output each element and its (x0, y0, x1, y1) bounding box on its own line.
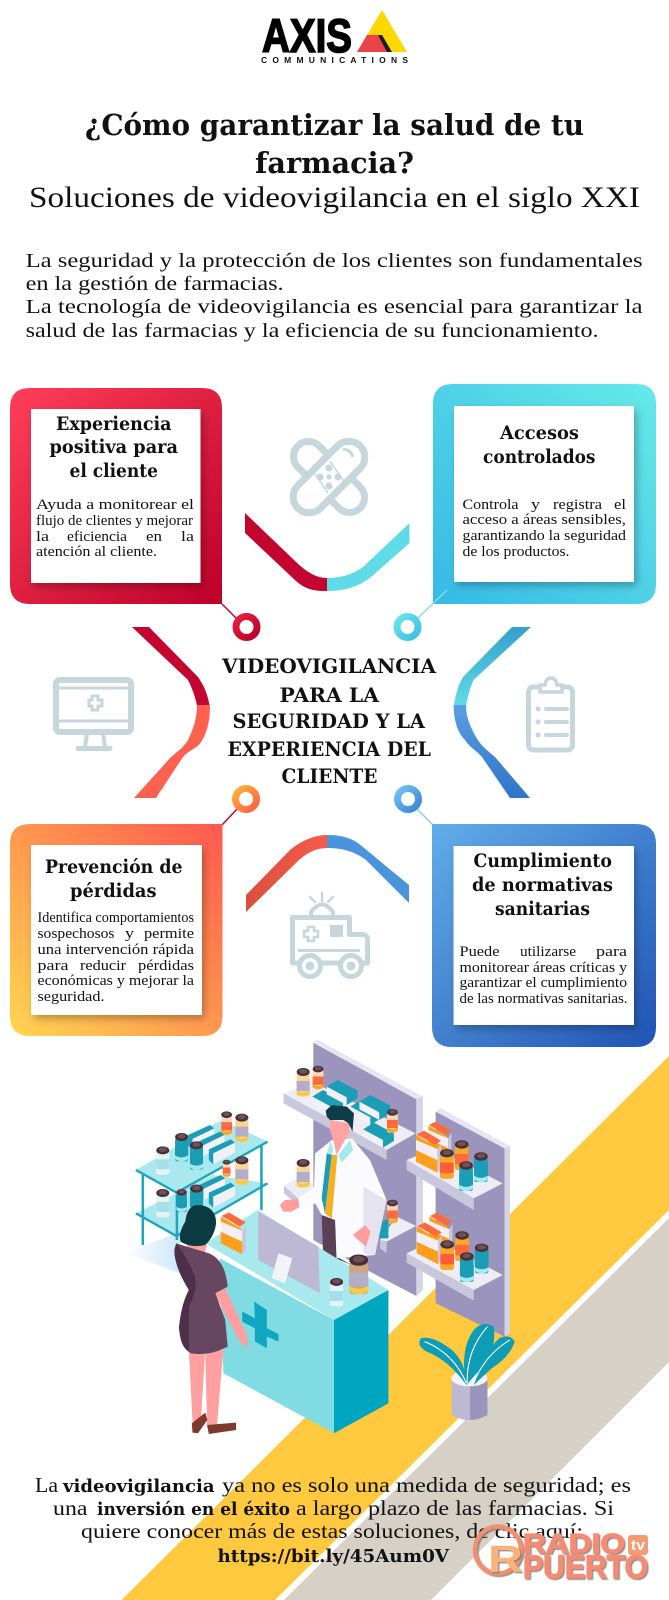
intro paragraph (26, 250, 643, 342)
curve: bottom connector (246, 835, 409, 912)
heading: accesos controlados: controlados (483, 446, 596, 468)
text: accesos controlados: Controla (462, 497, 519, 513)
logo: Axis Communications: COMMUNICATIONS (261, 55, 408, 65)
intro paragraph: La tecnología de videovigilancia es esencial para garantizar la (26, 296, 643, 318)
intro paragraph: en la gestión de farmacias. (26, 273, 284, 295)
intro paragraph: salud de las farmacias y la eficiencia de su funcionamiento. (26, 320, 599, 342)
text: prevención de pérdidas: reducir (80, 958, 126, 974)
text: cumplimiento de normativas: utilizarse (520, 944, 576, 960)
logo: Axis Communications: AXIS (262, 9, 352, 62)
central heading (221, 654, 436, 788)
text: cumplimiento de normativas (460, 944, 628, 1007)
text: prevención de pérdidas: económicas y mejorar la (38, 973, 194, 989)
closing text (35, 1473, 631, 1567)
central heading: EXPERIENCIA DEL (228, 737, 431, 761)
closing text: a largo plazo de las farmacias. Si (296, 1496, 614, 1520)
watermark: Radio Puerto TV: RADIO (523, 1528, 625, 1559)
closing text: videovigilancia (62, 1476, 215, 1497)
text: prevención de pérdidas: pérdidas (138, 958, 194, 974)
text: experiencia positiva: atención al cliente. (36, 544, 157, 560)
text: cumplimiento de normativas: monitorear áreas críticas y (460, 960, 628, 976)
text: experiencia positiva: Ayuda a monitorear el (36, 497, 194, 513)
closing text: La (35, 1473, 59, 1497)
illustration: pharmacy counter scene (125, 1040, 515, 1434)
text: experiencia positiva (36, 497, 194, 560)
heading: prevención de pérdidas: pérdidas (70, 880, 156, 902)
text: accesos controlados: garantizando la seguridad (462, 528, 627, 544)
text: experiencia positiva: flujo de clientes y mejorar (36, 513, 193, 529)
heading: cumplimiento de normativas (472, 850, 613, 920)
panel: prevención de pérdidas (10, 824, 222, 1036)
watermark: Radio Puerto TV: PUERTO (523, 1549, 648, 1585)
title: ¿Cómo garantizar la salud de tu (85, 108, 584, 142)
heading: experiencia positiva: Experiencia (56, 413, 172, 435)
counter (205, 1210, 388, 1433)
connector ring: orange (222, 788, 256, 825)
background stripes (122, 1056, 669, 1600)
text: accesos controlados: de los productos. (462, 544, 570, 560)
text: prevención de pérdidas: una intervención rápida (38, 942, 194, 958)
text: prevención de pérdidas: permite (144, 926, 194, 942)
heading: prevención de pérdidas (45, 856, 182, 902)
curve: right bracket (454, 627, 531, 798)
text: prevención de pérdidas: y (125, 926, 135, 942)
shelf products (297, 1066, 489, 1282)
heading: cumplimiento de normativas: Cumplimiento (474, 850, 612, 872)
title (85, 108, 584, 180)
heading: accesos controlados: Accesos (499, 422, 579, 444)
heading: experiencia positiva (50, 413, 178, 482)
heading: experiencia positiva: positiva para (50, 436, 178, 458)
subtitle: Soluciones de videovigilancia en el siglo XXI (29, 181, 640, 214)
central heading: CLIENTE (282, 764, 378, 788)
closing text: inversión en el éxito (97, 1499, 290, 1520)
heading: cumplimiento de normativas: de normativas (472, 874, 613, 896)
central heading: VIDEOVIGILANCIA (221, 654, 436, 678)
heading: accesos controlados (483, 422, 596, 468)
text: accesos controlados: acceso a áreas sensibles, (462, 512, 626, 528)
text: prevención de pérdidas (38, 910, 194, 1005)
heading: cumplimiento de normativas: sanitarias (495, 898, 590, 920)
icon: clipboard (528, 678, 572, 750)
customer (174, 1205, 248, 1434)
watermark: Radio Puerto TV: tv (631, 1537, 646, 1554)
text: prevención de pérdidas: seguridad. (38, 989, 104, 1005)
pharmacist (280, 1105, 387, 1265)
panel: experiencia positiva (10, 388, 222, 604)
text: accesos controlados: registra (553, 497, 602, 513)
central heading: PARA LA (280, 683, 379, 707)
text: cumplimiento de normativas: de las normativas sanitarias. (460, 991, 628, 1007)
intro paragraph: La seguridad y la protección de los clientes son fundamentales (26, 250, 643, 272)
text: cumplimiento de normativas: Puede (460, 944, 500, 960)
panel: accesos controlados (433, 384, 656, 604)
shelving unit: back panels (284, 1040, 510, 1337)
text: experiencia positiva: eficiencia (67, 529, 127, 545)
text: cumplimiento de normativas: para (596, 944, 627, 960)
text: experiencia positiva: la (36, 529, 49, 545)
curve: left bracket (132, 627, 210, 798)
closing text: quiere conocer más de estas soluciones, de clic aquí: (81, 1519, 583, 1543)
text: experiencia positiva: en (146, 529, 163, 545)
central heading: SEGURIDAD Y LA (232, 709, 425, 733)
icon: ambulance (292, 893, 368, 976)
text: prevención de pérdidas: Identifica comportamientos (38, 910, 194, 926)
text: cumplimiento de normativas: garantizar el cumplimiento (460, 975, 627, 991)
text: experiencia positiva: la (181, 529, 194, 545)
connector ring: red (222, 604, 257, 638)
text: accesos controlados: el (614, 497, 626, 513)
title: farmacia? (255, 146, 414, 180)
watermark: Radio Puerto TV (475, 1526, 648, 1585)
glass side shelf (125, 1111, 268, 1273)
closing text: ya no es solo una medida de seguridad; es (222, 1473, 631, 1497)
icon: computer (56, 680, 131, 748)
heading: prevención de pérdidas: Prevención de (45, 856, 182, 878)
panel: cumplimiento de normativas (432, 824, 656, 1047)
closing text: https://bit.ly/45Aum0V (218, 1546, 450, 1567)
text: accesos controlados: y (531, 497, 541, 513)
connector ring: cyan (397, 590, 447, 638)
text: accesos controlados (462, 497, 627, 560)
text: prevención de pérdidas: sospechosos (38, 926, 115, 942)
closing text: una (53, 1496, 88, 1520)
connector ring: blue (398, 788, 433, 825)
curve: top connector (245, 513, 410, 591)
watermark: Radio Puerto TV: R (488, 1539, 523, 1581)
heading: experiencia positiva: el cliente (70, 460, 158, 482)
icon: bandage (287, 435, 371, 519)
plant (419, 1324, 515, 1420)
text: prevención de pérdidas: para (38, 958, 69, 974)
